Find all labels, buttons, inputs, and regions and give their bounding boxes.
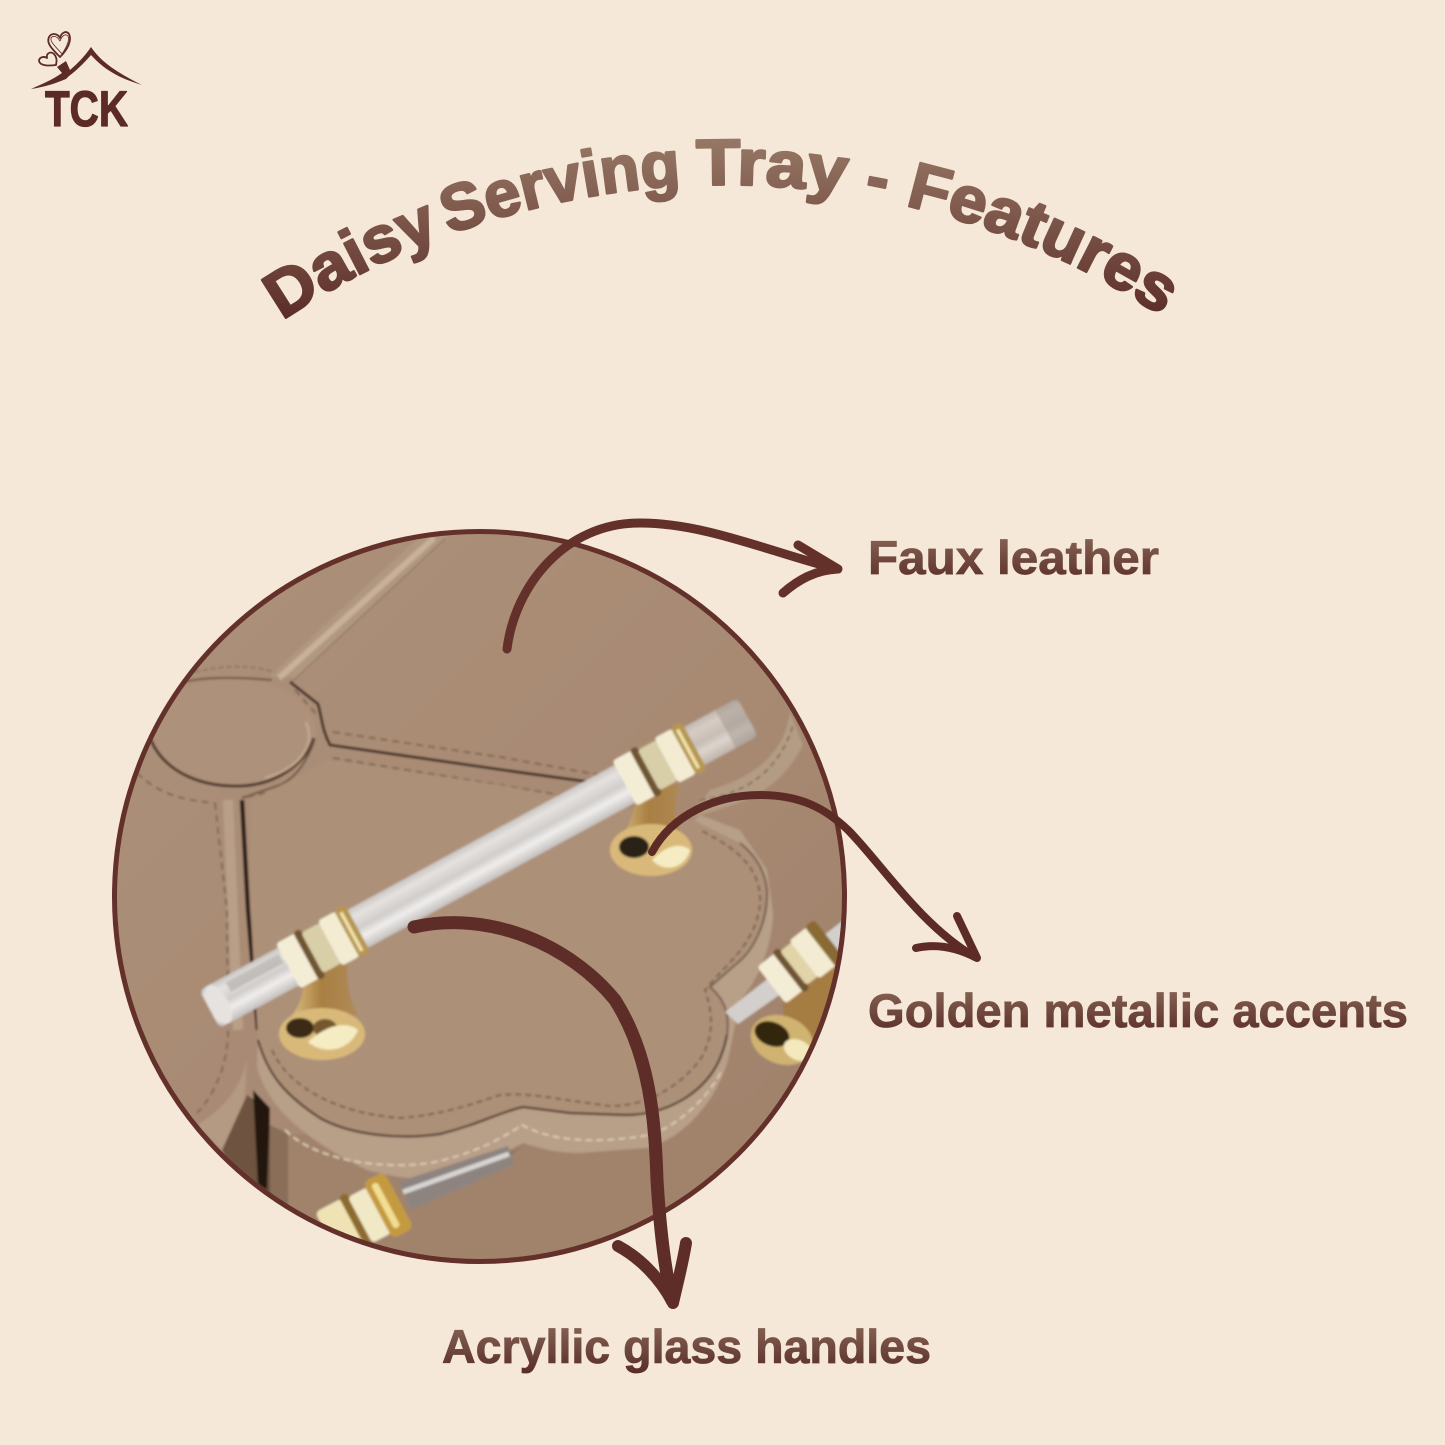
label: faux leather: Faux leather bbox=[868, 531, 1159, 584]
left collar bbox=[275, 904, 371, 990]
label: golden metallic accents: Golden metallic accents bbox=[868, 984, 1408, 1037]
logo wordmark: TCK bbox=[45, 81, 128, 137]
arrow: golden accents bbox=[652, 795, 977, 958]
acrylic rod bbox=[196, 693, 760, 1033]
label: acrylic glass handles: Acryllic glass handles bbox=[442, 1320, 931, 1373]
right collar bbox=[612, 722, 707, 807]
flower side stitching bbox=[285, 1070, 722, 1165]
dark gap behind flower bbox=[221, 1094, 271, 1193]
leather base bbox=[117, 534, 842, 1156]
dark seams bbox=[290, 682, 590, 782]
dark shadow under flower bbox=[510, 1150, 516, 1154]
back petal right bbox=[690, 712, 803, 818]
round centre disc bbox=[148, 679, 316, 787]
flower top surface bbox=[250, 760, 767, 1136]
icon: roof bbox=[31, 47, 142, 89]
logo: TCK bbox=[31, 32, 142, 137]
lower left panel bbox=[198, 1068, 246, 1149]
circle border bbox=[114, 532, 844, 1262]
arrow: faux leather bbox=[507, 523, 838, 649]
stitching bbox=[137, 690, 600, 1113]
left post bbox=[279, 960, 365, 1060]
title: Daisy Serving Tray - Features bbox=[260, 138, 1174, 319]
right rear handle bbox=[724, 920, 841, 1066]
right post bbox=[610, 785, 692, 876]
lower leather bbox=[288, 1135, 300, 1206]
panel: product photo circle bbox=[100, 520, 860, 1280]
icon: hearts bbox=[39, 32, 70, 66]
flower side thickness bbox=[257, 815, 773, 1178]
bottom handle bbox=[316, 1146, 514, 1243]
arrow: acrylic handles bbox=[414, 923, 686, 1303]
top seam strip bbox=[270, 536, 450, 678]
